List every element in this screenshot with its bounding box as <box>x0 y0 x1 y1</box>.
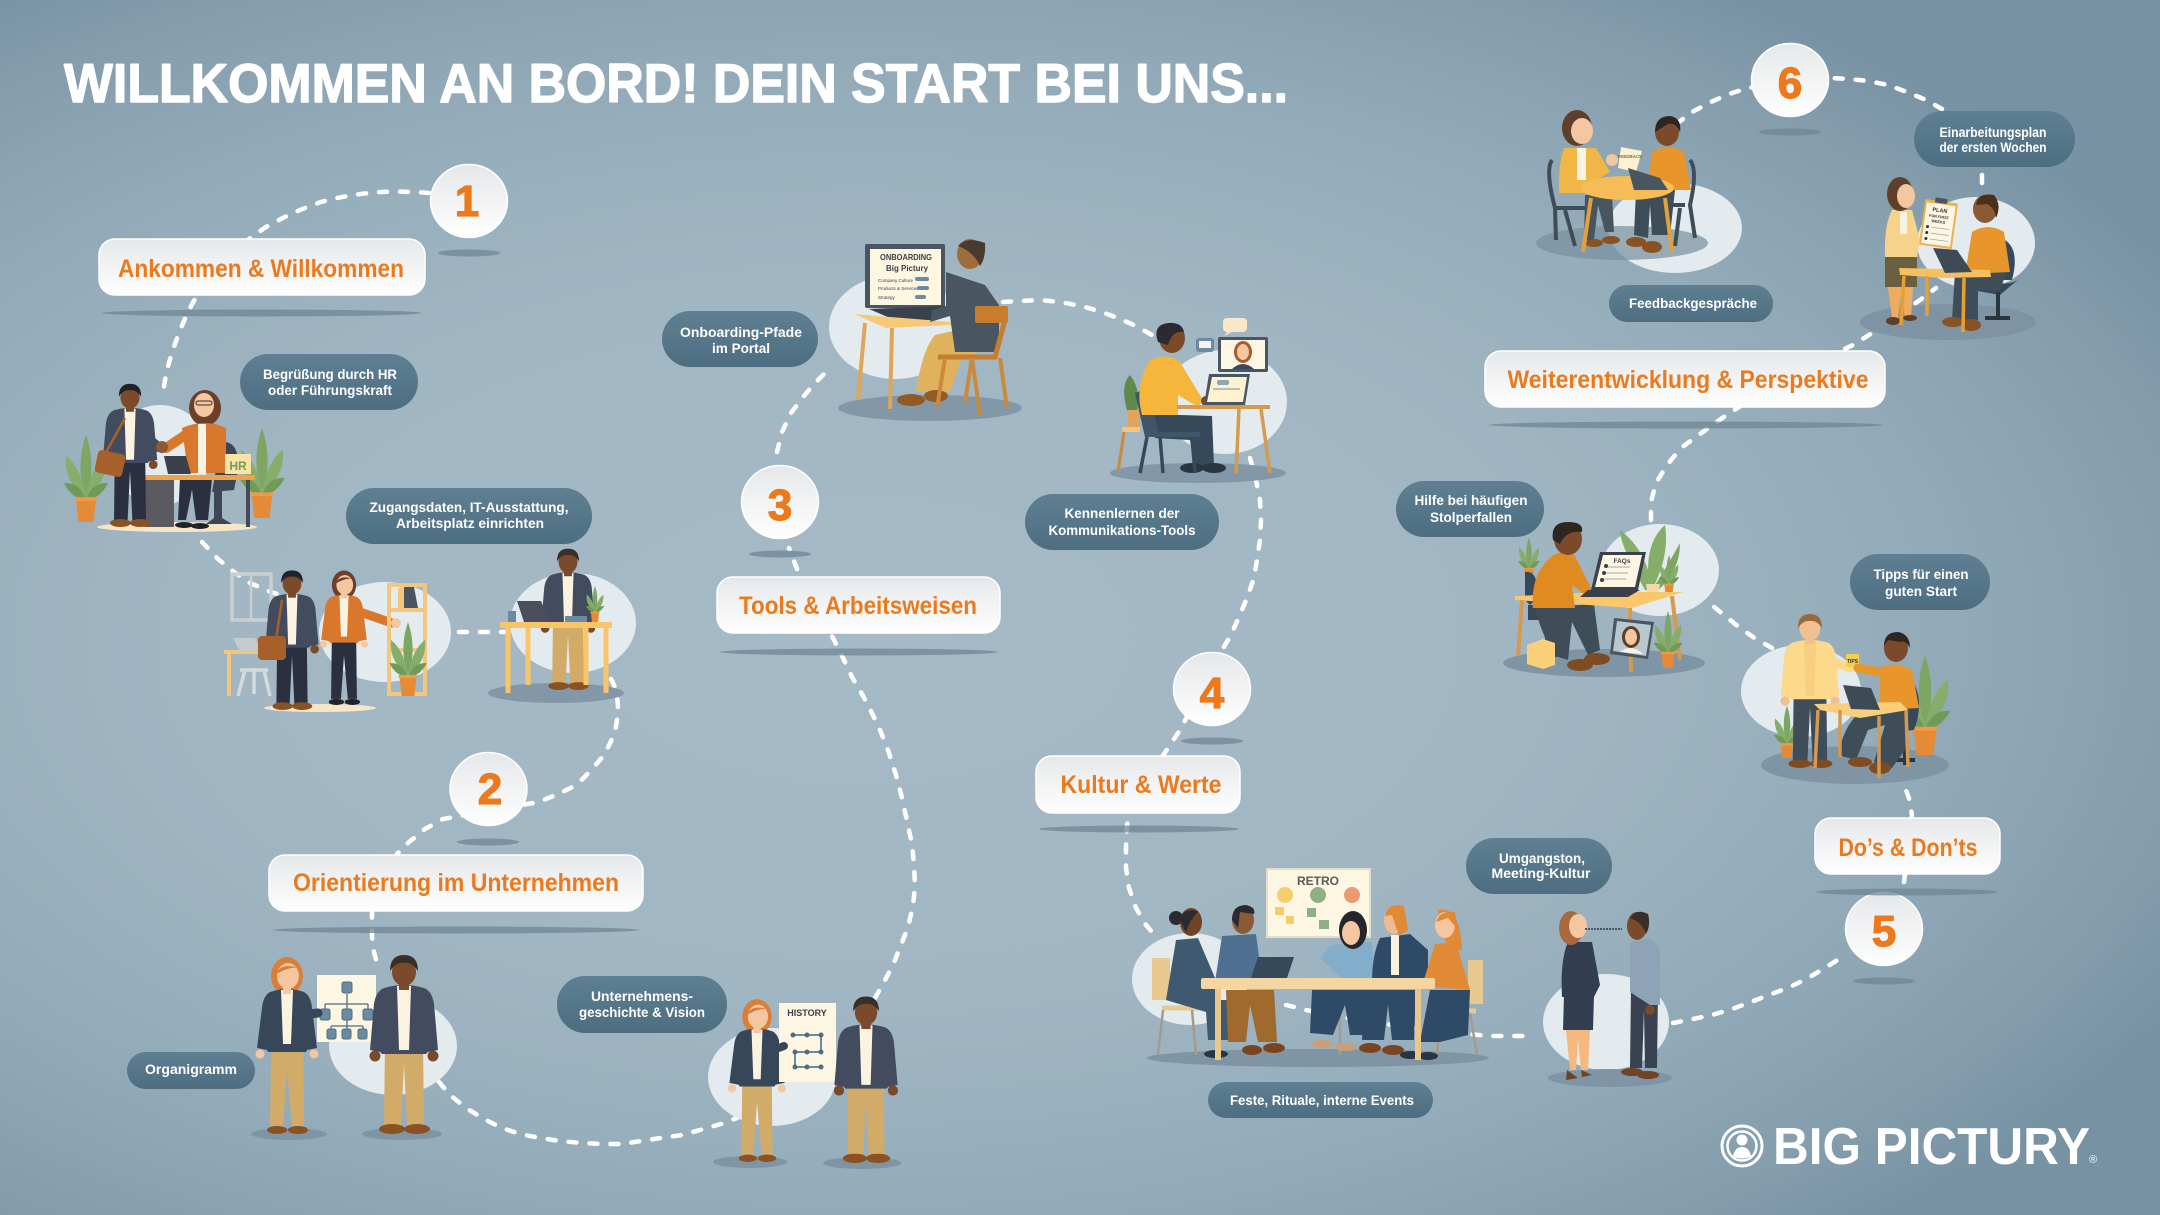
scene: onboarding portal on laptop: Strategy <box>878 295 896 300</box>
number badge 6: 6 <box>1778 59 1802 108</box>
callout: Kommunikations-Tools <box>1025 494 1219 550</box>
callout: Umgangston: Umgangston, <box>1499 850 1585 866</box>
number badge 1 <box>430 164 508 256</box>
scene: feedback conversation: FEEDBACK <box>1617 154 1643 159</box>
heading: Kultur & Werte <box>1036 756 1240 832</box>
person D <box>1359 905 1428 1055</box>
callout: Hilfe <box>1396 481 1544 537</box>
heading: Orientierung im Unternehmen <box>269 855 643 934</box>
scene: company history: HISTORY <box>787 1008 827 1018</box>
callout: Tipps: Tipps für einen <box>1874 566 1968 582</box>
callout: Einarbeitungsplan <box>1914 111 2075 167</box>
person C <box>1310 911 1374 1051</box>
callout: Unternehmensgeschichte <box>557 976 727 1033</box>
scene: retro meeting at table <box>1132 869 1489 1067</box>
dashed journey path <box>163 78 1982 1144</box>
callout: Zugangsdaten <box>346 488 592 544</box>
callout: Begrüßung durch HR: Begrüßung durch HR <box>263 366 397 382</box>
number badge 1: 1 <box>455 177 479 226</box>
scene: onboarding portal on laptop: ONBOARDING <box>880 252 932 262</box>
panel: step 1 Ankommen und Willkommen <box>64 164 636 712</box>
icon: org chart <box>320 982 373 1039</box>
callout: Unternehmensgeschichte: geschichte & Vision <box>579 1004 705 1020</box>
callout: Feedbackgespräche: Feedbackgespräche <box>1629 295 1757 311</box>
callout: Organigramm: Organigramm <box>145 1061 237 1077</box>
heading: Orientierung im Unternehmen: Orientierung im Unternehmen <box>293 869 619 897</box>
person A <box>1166 908 1230 1058</box>
number badge 4: 4 <box>1200 669 1225 718</box>
title: WILLKOMMEN AN BORD! DEIN START BEI UNS... <box>64 52 1288 114</box>
scene: plan for first weeks: FOR FIRST <box>1929 214 1950 221</box>
panel: step 6 Weiterentwicklung und Perspektive <box>1485 44 2075 428</box>
logo: Big Pictury: ® <box>2089 1154 2097 1166</box>
number badge 3 <box>742 466 818 558</box>
scene: feedback conversation <box>1536 110 1742 273</box>
scene: onboarding portal on laptop <box>829 239 1022 421</box>
scene: two colleagues talking <box>1543 911 1672 1087</box>
heading: Do's & Don'ts <box>1815 818 2000 896</box>
person B <box>1215 905 1285 1055</box>
heading: Weiterentwicklung & Perspektive: Weiterentwicklung & Perspektive <box>1508 366 1869 394</box>
heading: Kultur & Werte: Kultur & Werte <box>1060 771 1222 799</box>
scene: handshake at HR desk: HR <box>229 459 247 473</box>
callout: Feste, Rituale: Feste, Rituale, interne Events <box>1230 1092 1414 1108</box>
callout: Einarbeitungsplan: Einarbeitungsplan <box>1940 124 2046 140</box>
heading: Weiterentwicklung & Perspektive <box>1485 351 1885 428</box>
number badge 4 <box>1174 652 1250 744</box>
scene: organisation chart <box>251 955 457 1140</box>
panel: step 3 Tools und Arbeitsweisen <box>662 239 1287 656</box>
callout: Onboarding-Pfade: Onboarding-Pfade <box>680 324 802 340</box>
number badge 6 <box>1752 44 1828 136</box>
heading: Tools & Arbeitsweisen: Tools & Arbeitsweisen <box>739 592 977 620</box>
scene: company history <box>708 997 901 1169</box>
callout: Hilfe: Hilfe bei häufigen <box>1414 492 1528 508</box>
scene: tips handover: TIPS <box>1847 659 1859 665</box>
panel: step 5 Do's und Don'ts <box>1396 481 2000 1087</box>
callout: Kommunikations-Tools: Kommunikations-Tools <box>1048 522 1196 538</box>
callout: Umgangston: Meeting-Kultur <box>1492 865 1591 881</box>
heading: Ankommen & Willkommen <box>99 239 425 316</box>
scene: tips handover <box>1741 614 1950 784</box>
scene: plan for first weeks <box>1860 177 2036 340</box>
logo: Big Pictury: BIG PICTURY <box>1773 1118 2090 1176</box>
callout: Umgangston <box>1466 838 1612 894</box>
scene: video call <box>1110 318 1287 483</box>
scene: FAQ at laptop <box>1503 522 1719 677</box>
callout: Tipps: guten Start <box>1885 583 1957 599</box>
callout: Tipps <box>1850 554 1990 610</box>
scene: onboarding portal on laptop: Big Pictury <box>886 263 928 273</box>
callout: Unternehmensgeschichte: Unternehmens- <box>591 988 693 1004</box>
heading: Do's & Don'ts: Do’s & Don’ts <box>1838 834 1978 862</box>
panel: step 4 Kultur und Werte <box>1036 652 1612 1118</box>
scene: handshake at HR desk <box>64 384 285 532</box>
scene: office tour walking <box>224 570 451 712</box>
callout: Zugangsdaten: Arbeitsplatz einrichten <box>396 515 544 531</box>
scene: standing desk setup <box>488 549 636 703</box>
scene: onboarding portal on laptop: Company Culture <box>878 278 914 283</box>
callout: Feedbackgespräche <box>1609 285 1773 322</box>
callout: Kommunikations-Tools: Kennenlernen der <box>1064 505 1180 521</box>
callout: Begrüßung durch HR: oder Führungskraft <box>268 382 392 398</box>
number badge 2: 2 <box>478 765 502 814</box>
retro board <box>1267 869 1370 937</box>
panel: step 2 Orientierung im Unternehmen <box>127 752 901 1169</box>
scene: plan for first weeks: WEEKS <box>1931 219 1946 225</box>
callout: Organigramm <box>127 1052 255 1089</box>
scene: FAQ at laptop: FAQs <box>1614 558 1631 565</box>
callout: Hilfe: Stolperfallen <box>1430 509 1512 525</box>
callout: Feste, Rituale <box>1208 1082 1433 1118</box>
person E <box>1400 910 1470 1060</box>
callout: Zugangsdaten: Zugangsdaten, IT-Ausstattung, <box>370 499 568 515</box>
heading: Ankommen & Willkommen: Ankommen & Willkommen <box>118 255 404 283</box>
number badge 5 <box>1846 892 1922 984</box>
retro board: RETRO <box>1297 874 1339 888</box>
scene: onboarding portal on laptop: Products & Services <box>878 286 919 291</box>
number badge 3: 3 <box>768 481 792 530</box>
number badge 5: 5 <box>1872 907 1896 956</box>
number badge 2 <box>450 752 527 846</box>
callout: Begrüßung durch HR <box>240 354 418 410</box>
scene: plan for first weeks: PLAN <box>1932 207 1948 215</box>
callout: Einarbeitungsplan: der ersten Wochen <box>1940 139 2046 155</box>
callout: Onboarding-Pfade: im Portal <box>712 340 770 356</box>
heading: Tools & Arbeitsweisen <box>717 577 1000 656</box>
callout: Onboarding-Pfade <box>662 311 818 367</box>
